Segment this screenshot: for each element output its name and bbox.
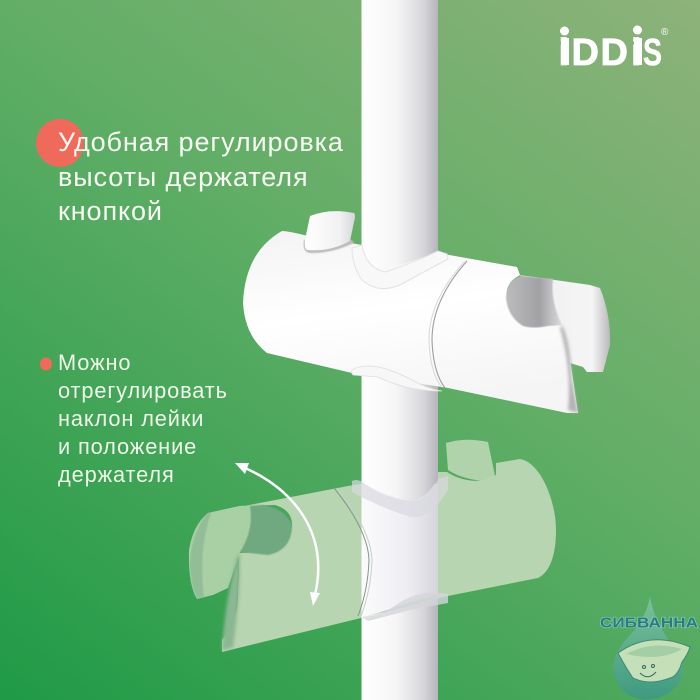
side note text: и положение	[58, 434, 197, 459]
heading	[58, 127, 344, 226]
heading: кнопкой	[58, 196, 163, 226]
heading: Удобная регулировка	[58, 127, 344, 157]
tinted jaw shade	[222, 553, 240, 650]
tinted button	[446, 440, 495, 481]
upper holder	[243, 190, 610, 413]
pole through collar	[362, 190, 438, 271]
jaw tip shade	[560, 325, 578, 413]
translucent lower collar	[362, 593, 448, 621]
lower collar	[351, 366, 442, 391]
watermark wordmark: СИБВАННА	[600, 614, 698, 632]
side note text	[58, 350, 228, 487]
watermark face	[640, 664, 656, 677]
hole in holder	[506, 276, 562, 328]
side note text: Можно	[58, 350, 131, 375]
watermark drop	[613, 597, 683, 699]
watermark tub	[618, 640, 690, 682]
translucent upper collar	[352, 476, 448, 517]
lower holder tinted	[189, 430, 556, 652]
tinted body	[208, 459, 556, 652]
red bullet dot	[40, 358, 52, 370]
logo: S	[643, 32, 662, 74]
logo: iDDi	[558, 32, 642, 74]
button	[305, 211, 355, 250]
pole	[362, 0, 438, 700]
red accent circle	[36, 119, 84, 167]
tinted seam	[334, 488, 369, 616]
holder body	[243, 231, 578, 413]
heading: высоты держателя	[58, 162, 308, 192]
tinted hole	[240, 505, 292, 555]
side note text: наклон лейки	[58, 406, 204, 431]
side note text: держателя	[58, 462, 175, 487]
tinted overlay on pole	[362, 484, 438, 618]
upper collar	[352, 245, 448, 289]
holder back jaw	[520, 275, 610, 372]
pole top visible	[362, 430, 438, 501]
side note text: отрегулировать	[58, 378, 228, 403]
watermark tub interior	[626, 645, 682, 657]
logo: ®	[661, 27, 669, 38]
button shadow	[304, 240, 354, 253]
tinted back jaw	[189, 505, 268, 599]
seam line	[432, 261, 467, 388]
double-headed arrow	[235, 463, 320, 606]
